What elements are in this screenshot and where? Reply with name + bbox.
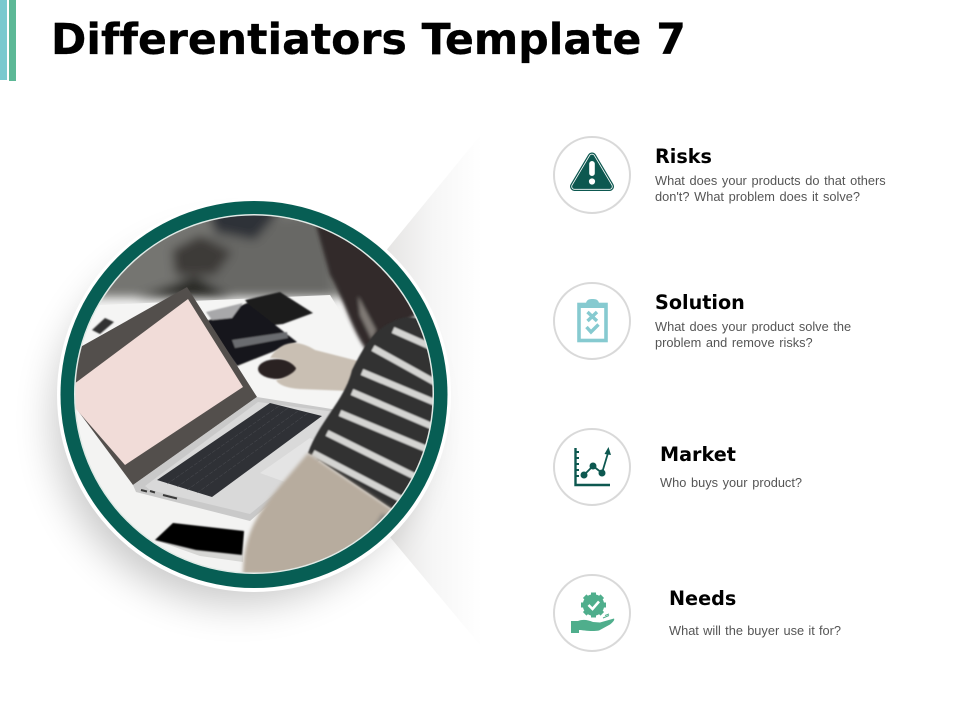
gray cone behind circle [380, 132, 483, 645]
heading: solution: Solution [655, 291, 745, 314]
item: market [553, 428, 802, 506]
hand [270, 343, 362, 391]
description: solution [655, 319, 851, 350]
trackpad [260, 438, 313, 481]
item: risks [553, 136, 886, 214]
icon: hand with gear [553, 574, 631, 652]
accent bars [0, 0, 16, 81]
keyboard [157, 403, 322, 497]
green ring [60, 201, 448, 588]
striped shirt [307, 317, 432, 509]
laptop lid [70, 287, 257, 485]
phone [155, 523, 244, 562]
description: risks: don't? What problem does it solve? [655, 189, 860, 204]
mouse [258, 359, 298, 379]
description: risks: What does your products do that others [655, 173, 886, 188]
hair [314, 226, 416, 350]
clutter on desk [92, 318, 114, 334]
circle shadow [54, 236, 422, 604]
thin pale photo edge [75, 215, 433, 573]
bare arm [243, 453, 393, 574]
heading: risks: Risks [655, 145, 712, 168]
laptop base [133, 397, 338, 521]
photo of laptop on desk [70, 205, 440, 580]
photo medallion [36, 188, 452, 622]
item: solution [553, 282, 851, 360]
heading: needs: Needs [669, 587, 736, 610]
description: market: Who buys your product? [660, 475, 802, 490]
description: solution: What does your product solve the [655, 319, 851, 334]
icon: warning triangle [553, 136, 631, 214]
icon: growth chart [553, 428, 631, 506]
item: needs [553, 574, 841, 652]
description: risks [655, 173, 886, 204]
ports [141, 490, 177, 498]
desk [110, 295, 336, 307]
icon: clipboard checklist [553, 282, 631, 360]
title: Differentiators Template 7 [51, 15, 686, 65]
description: solution: problem and remove risks? [655, 335, 813, 350]
white outer ring [57, 198, 451, 592]
heading: market: Market [660, 443, 736, 466]
tablet and notebook [205, 292, 313, 366]
description: needs: What will the buyer use it for? [669, 623, 841, 638]
